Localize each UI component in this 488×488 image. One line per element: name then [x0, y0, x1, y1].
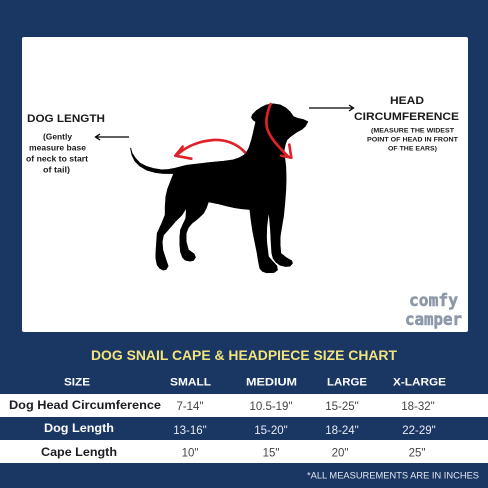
table header row: MEDIUM [246, 376, 297, 388]
table row: cape length [0, 440, 488, 463]
table row: dog head circumference: 7-14" [176, 401, 204, 413]
text block: dog length: DOG LENGTH [27, 113, 105, 125]
table row: dog head circumference: 18-32" [401, 401, 435, 413]
table row: dog head circumference: Dog Head Circumference [9, 400, 161, 412]
logo: comfy camper: comfy [409, 291, 458, 311]
logo: comfy camper [405, 291, 462, 330]
table row: cape length: 20" [332, 448, 348, 460]
table row: cape length: 10" [182, 448, 198, 460]
text block: head circumference: (MEASURE THE WIDEST [371, 128, 454, 134]
text block: dog length: (Gently [43, 132, 73, 142]
text block: dog length: of tail) [43, 166, 70, 174]
text block: head circumference: CIRCUMFERENCE [354, 111, 459, 123]
table header row: LARGE [327, 376, 367, 388]
table row: cape length: 15" [263, 448, 279, 460]
arrow: to dog length [96, 134, 129, 140]
table row: cape length: 25" [409, 448, 425, 460]
table header row [64, 376, 446, 388]
heading: size chart title: DOG SNAIL CAPE & HEADPIECE SIZE CHART [91, 348, 398, 363]
text block: head circumference [354, 95, 459, 152]
table row: dog head circumference [0, 394, 488, 417]
table row: dog length [44, 423, 436, 437]
table row: dog length: 13-16" [173, 425, 207, 437]
icon: dog silhouette [131, 104, 308, 273]
panel: dog measurement diagram [22, 37, 468, 332]
table header row: SMALL [170, 376, 211, 388]
text block: dog length [26, 113, 105, 174]
icon: red body length arrow [175, 140, 245, 159]
text block: head circumference: POINT OF HEAD IN FRONT [367, 136, 458, 144]
icon: red head circumference arrow [266, 104, 291, 158]
text block: head circumference: OF THE EARS) [388, 146, 437, 152]
table row: dog head circumference: 15-25" [325, 401, 359, 413]
table row: cape length: Cape Length [41, 447, 117, 459]
logo: comfy camper: camper [405, 310, 462, 330]
text block: dog length: measure base [29, 144, 87, 152]
footnote: *ALL MEASUREMENTS ARE IN INCHES [307, 470, 479, 482]
text block: head circumference: HEAD [390, 95, 424, 107]
table header row: SIZE [64, 376, 90, 388]
table row: dog length: 22-29" [402, 425, 436, 437]
table row: dog length: 15-20" [254, 425, 288, 437]
table header row: X-LARGE [393, 376, 446, 388]
table: size chart [0, 376, 488, 463]
text block: dog length: of neck to start [26, 154, 88, 164]
arrow: to head circumference [309, 105, 354, 111]
table row: dog length: 18-24" [325, 425, 359, 437]
table row: dog length: Dog Length [44, 423, 114, 435]
table row: dog head circumference: 10.5-19" [249, 401, 293, 413]
